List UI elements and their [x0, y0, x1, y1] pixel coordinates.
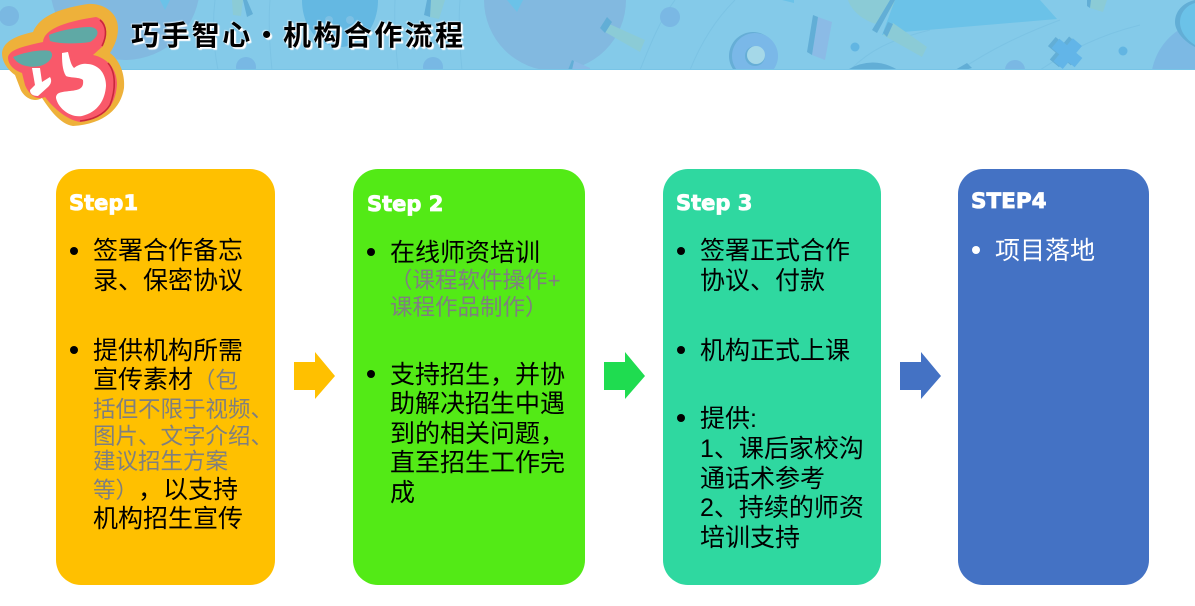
text block: step 1 second bullet: 图片、文字介绍、	[93, 424, 273, 449]
text block: step 3 first bullet: 签署正式合作	[700, 237, 850, 265]
header banner	[0, 0, 1195, 70]
text block: step 1 second bullet: 建议招生方案	[93, 449, 228, 474]
panel: step 2	[353, 169, 585, 585]
text block: step 2 first bullet: 课程作品制作）	[390, 295, 548, 320]
arrow: step 2 to 3	[604, 352, 645, 399]
text block: step 2 second bullet: 直至招生工作完	[390, 449, 565, 477]
text block: step 2 first bullet: 在线师资培训	[390, 239, 540, 267]
text block: step 3 first bullet	[677, 237, 850, 295]
text block: step 3 third bullet	[677, 405, 864, 552]
text block: step 1 second bullet: 机构招生宣传	[93, 505, 243, 533]
text block: step 3 second bullet: 机构正式上课	[700, 337, 850, 365]
text block: step 3 third bullet: 提供:	[700, 405, 757, 433]
text block: step 2 first bullet: （课程软件操作+	[390, 268, 561, 293]
logo	[2, 4, 124, 126]
text block: step 3 third bullet: 通话术参考	[700, 465, 825, 493]
arrow: step 1 to 2	[294, 352, 335, 399]
text block: step 1 first bullet: 签署合作备忘	[93, 237, 243, 265]
text block: step 2 second bullet: 助解决招生中遇	[390, 390, 565, 418]
text block: step 1 first bullet	[70, 237, 243, 295]
heading: step 2: Step 2	[367, 192, 443, 216]
panel: step 1	[56, 169, 275, 585]
arrow: step 3 to 4	[900, 352, 941, 399]
text block: step 2 second bullet: 到的相关问题，	[390, 420, 565, 448]
heading: step 4: STEP4	[971, 189, 1047, 214]
text block: step 1 second bullet: 括但不限于视频、	[93, 397, 273, 422]
heading: step 1: Step1	[69, 191, 138, 215]
text block: step 2 second bullet: 支持招生，并协	[390, 361, 565, 389]
text block: step 2 first bullet	[367, 239, 561, 320]
text block: step 1 second bullet	[70, 337, 273, 533]
text block: step 3 first bullet: 协议、付款	[700, 267, 825, 295]
panel: step 3	[663, 169, 881, 585]
title: 巧手智心・机构合作流程	[131, 20, 465, 51]
text block: step 3 third bullet: 2、持续的师资	[700, 494, 864, 522]
panel: step 4	[958, 169, 1149, 585]
text block: step 4 bullet: 项目落地	[995, 237, 1095, 265]
text block: step 2 second bullet	[367, 361, 565, 507]
text block: step 1 second bullet: 等），以支持	[93, 476, 238, 504]
text block: step 1 first bullet: 录、保密协议	[93, 267, 243, 295]
text block: step 3 third bullet: 培训支持	[700, 524, 800, 552]
text block: step 2 second bullet: 成	[390, 479, 415, 507]
text block: step 1 second bullet: 宣传素材（包	[93, 366, 238, 394]
text block: step 1 second bullet: 提供机构所需	[93, 337, 243, 365]
text block: step 3 third bullet: 1、课后家校沟	[700, 435, 864, 463]
heading: step 3: Step 3	[676, 191, 752, 215]
